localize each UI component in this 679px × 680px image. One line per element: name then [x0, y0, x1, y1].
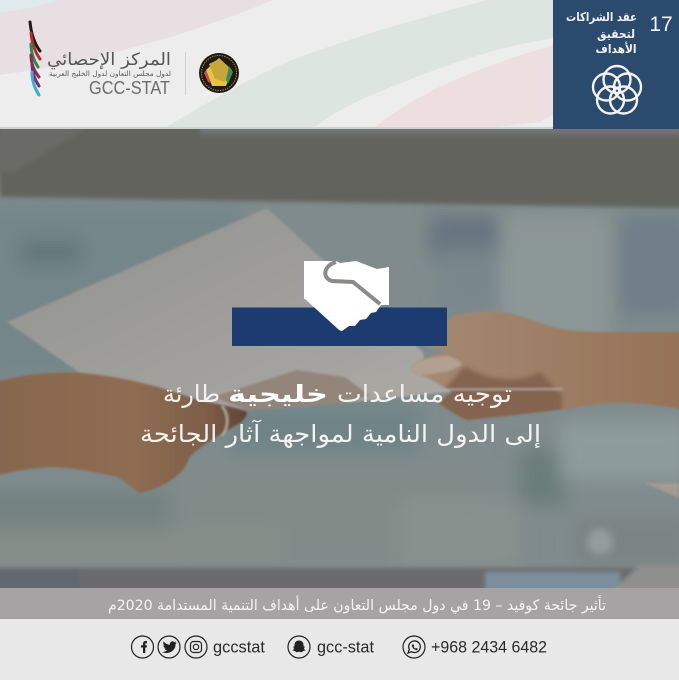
goal number: 17 — [649, 13, 673, 36]
icon: twitter — [158, 636, 180, 658]
bottom sill — [0, 564, 679, 588]
icon: handshake — [304, 261, 389, 331]
heading line 1: خليجية — [228, 380, 328, 408]
panel: SDG 17 — [553, 0, 679, 129]
logo wordmark: GCC-STAT — [89, 77, 170, 98]
footer — [0, 619, 679, 680]
icon: instagram — [185, 636, 207, 658]
goal title: الأهداف — [596, 41, 636, 56]
handle: gcc-stat: gcc-stat — [317, 638, 374, 656]
header band — [0, 0, 553, 129]
icon: facebook — [132, 636, 154, 658]
phone number: +968 2434 6482 — [431, 638, 547, 656]
document — [8, 208, 451, 410]
heading line 1: طارئة — [163, 380, 220, 408]
caption text: تأثير جائحة كوفيد – 19 في دول مجلس التعاون على أهداف التنمية المستدامة 2020م — [108, 595, 606, 614]
left hand — [0, 373, 247, 493]
icon: snapchat — [288, 636, 310, 658]
icon: GCC seal — [199, 53, 239, 93]
logo ribbon — [30, 22, 40, 95]
heading line 2: إلى الدول النامية لمواجهة آثار الجائحة — [140, 419, 541, 449]
icon: five interlocking rings — [593, 66, 641, 114]
blue title bar — [232, 308, 447, 346]
goal title: لتحقيق — [597, 27, 635, 41]
goal title: عقد الشراكات — [566, 10, 637, 24]
logo title: المركز الإحصائي — [47, 50, 171, 70]
goal title — [566, 10, 637, 56]
handle: gccstat: gccstat — [213, 638, 265, 656]
heading line 1: توجيه مساعدات — [337, 380, 512, 408]
right hand — [412, 312, 679, 425]
icon: whatsapp — [403, 636, 425, 658]
photo: hands passing a document — [0, 125, 679, 592]
caption bar — [0, 588, 679, 619]
heading line 1 — [163, 380, 512, 408]
top window band — [0, 125, 679, 208]
logo subtitle: لدول مجلس التعاون لدول الخليج العربية — [49, 70, 171, 78]
blurred city background — [0, 205, 679, 570]
logo: GCC-STAT — [30, 22, 171, 98]
second paper corner — [645, 483, 679, 498]
